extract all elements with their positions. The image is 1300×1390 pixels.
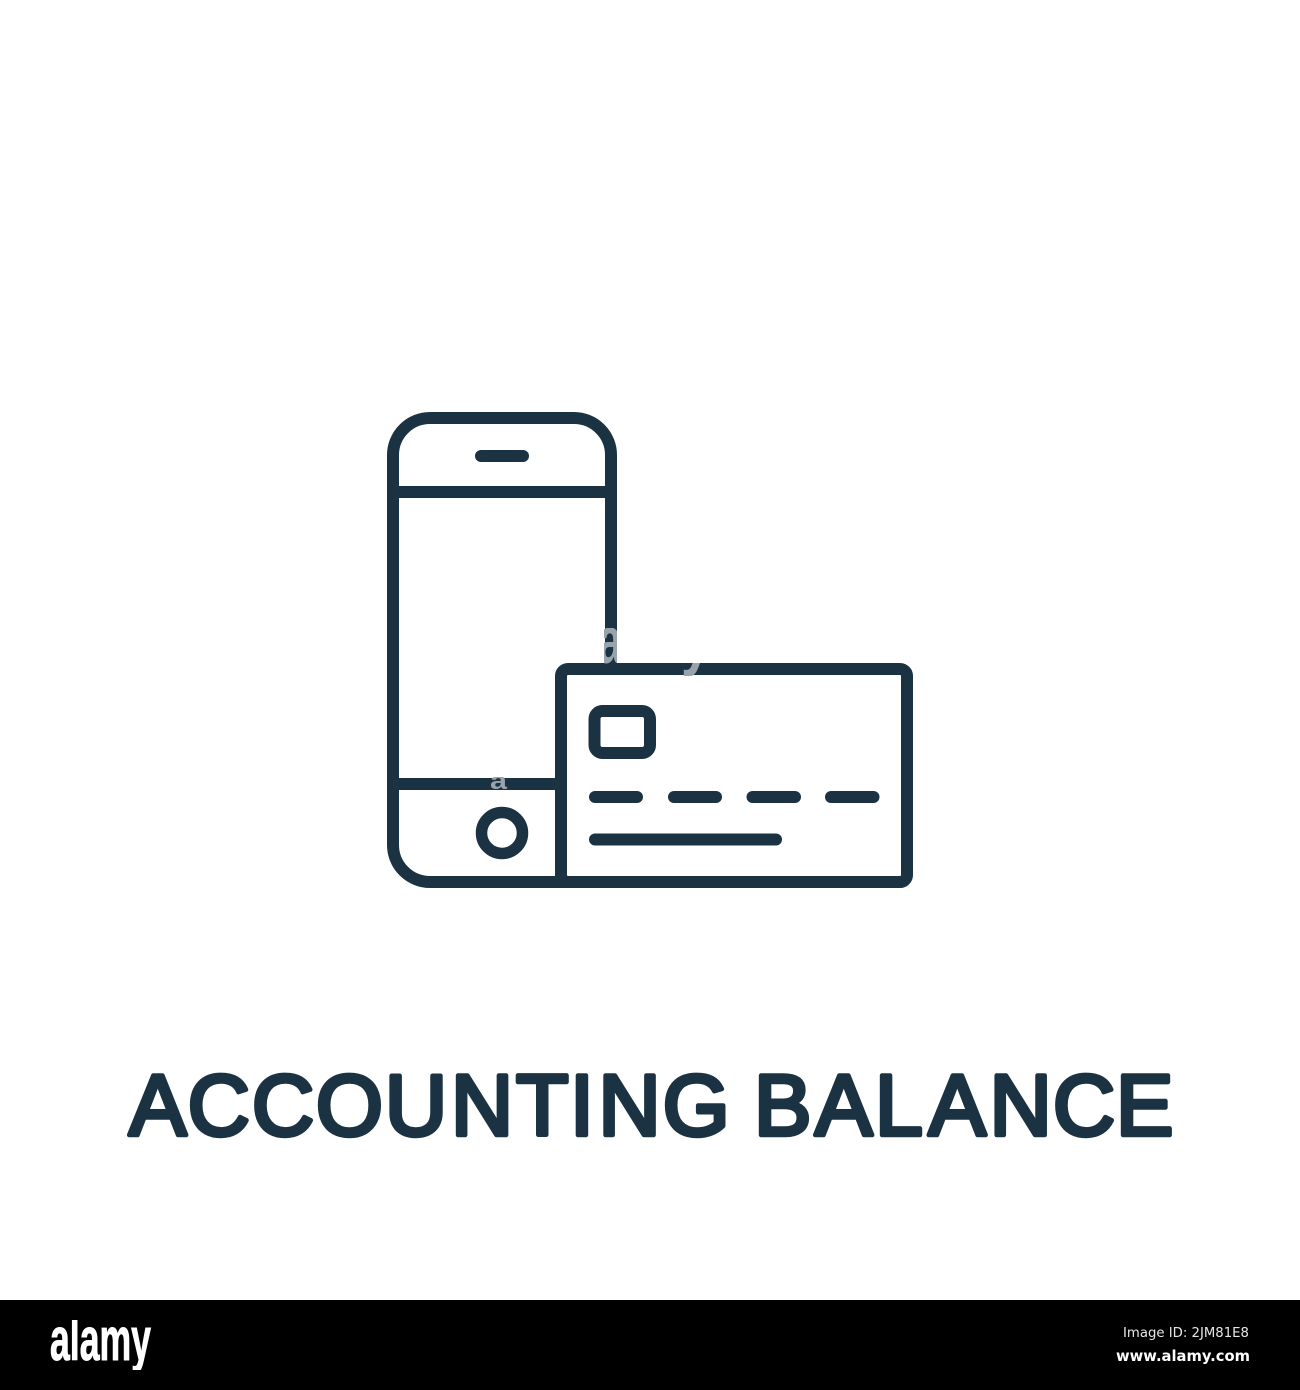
icon: smartphone and credit card bbox=[393, 418, 907, 882]
watermark fragments over icon bbox=[490, 628, 700, 789]
footer logo: alamy bbox=[50, 1306, 151, 1373]
watermark fragments over icon: a bbox=[490, 768, 508, 795]
footer bar bbox=[0, 1300, 1300, 1390]
footer image id: Image ID: 2JM81E8 bbox=[1123, 1325, 1249, 1341]
title: ACCOUNTING BALANCE bbox=[129, 1058, 1173, 1154]
watermark fragments over icon: y bbox=[681, 603, 711, 677]
watermark fragments over icon: a bbox=[598, 603, 623, 677]
footer url: www.alamy.com bbox=[1116, 1347, 1250, 1365]
infographic canvas bbox=[0, 412, 1300, 1390]
icon: credit card bbox=[561, 669, 907, 882]
icon: smartphone bbox=[393, 418, 611, 882]
